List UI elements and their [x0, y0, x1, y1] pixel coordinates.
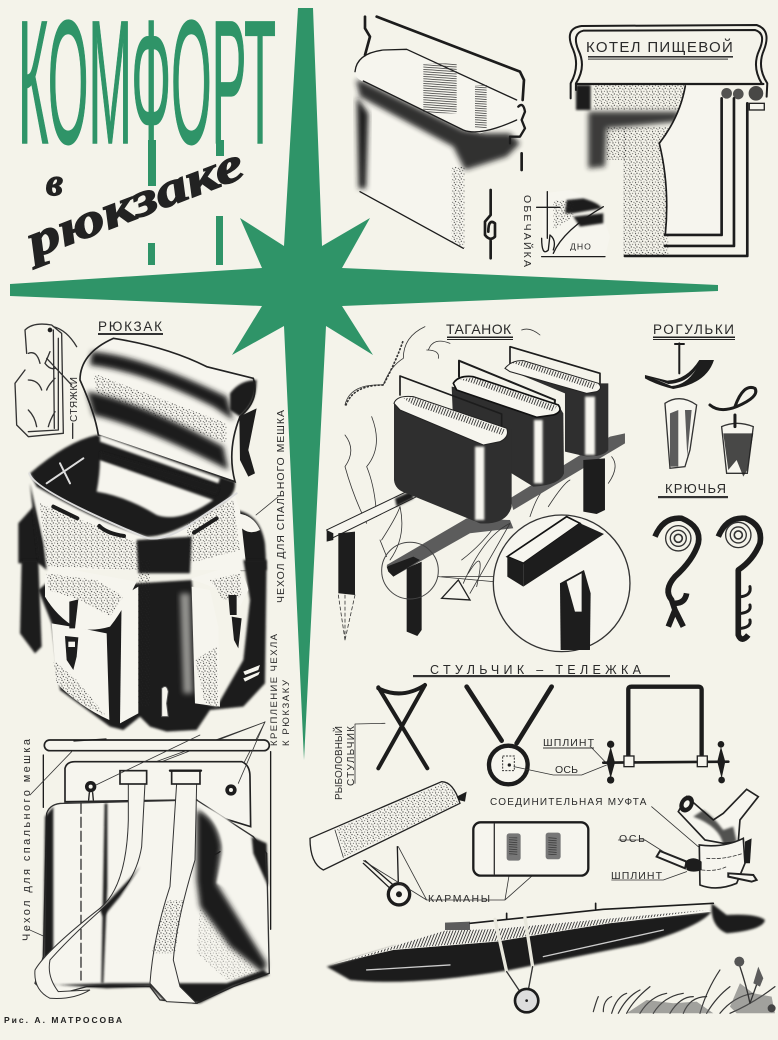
- rails: [327, 490, 417, 538]
- title: Комфорт: [18, 0, 276, 265]
- lower part: [20, 560, 267, 732]
- illustration: grass and flowers: [593, 957, 776, 1013]
- label: шплинт (sleeve): ШПЛИНТ: [611, 870, 663, 882]
- label: котел пищевой: КОТЕЛ ПИЩЕВОЙ: [586, 38, 734, 56]
- stitches and seam: [79, 803, 83, 980]
- center panel: [180, 593, 193, 693]
- smoke: [345, 327, 540, 405]
- green eight-pointed star: [10, 8, 718, 760]
- illustration: connecting sleeve: [612, 789, 758, 888]
- label: чехол для спального мешка (lower): Чехол для спального мешка: [21, 738, 33, 941]
- bottom detail: [542, 190, 610, 257]
- label: стяжки: СТЯЖКИ: [69, 377, 80, 422]
- label: чехол для спального мешка (upper): [256, 410, 287, 603]
- fasteners: [85, 781, 96, 792]
- buckles: [120, 771, 147, 784]
- illustration: kayak on cart: [327, 903, 765, 1012]
- label: крепление чехла к рюкзаку: КРЕПЛЕНИЕ ЧЕХЛА: [269, 633, 280, 746]
- right pocket: [192, 587, 220, 707]
- label: рогульки: РОГУЛЬКИ: [653, 322, 734, 337]
- folding stool: [378, 685, 427, 768]
- interior: [30, 435, 235, 537]
- illustration: hooks: [655, 518, 760, 639]
- label: ось (sleeve): ОСЬ: [619, 833, 645, 845]
- three tins: [394, 347, 608, 523]
- label: крепление чехла к рюкзаку: [92, 633, 292, 786]
- label: обечайка: ОБЕЧАЙКА: [521, 195, 534, 267]
- slots: [53, 507, 217, 536]
- label: стульчик — тележка: СТУЛЬЧИК – ТЕЛЕЖКА: [430, 663, 642, 677]
- big circle: [493, 515, 630, 652]
- illustration: assembled cart tube: [310, 782, 551, 905]
- left strap: [35, 783, 145, 999]
- wheel with legs: [467, 687, 552, 743]
- label: рыболовный стульчик: СТУЛЬЧИК: [346, 726, 357, 786]
- illustration: fishing stool and cart frame: [378, 685, 728, 784]
- illustration: cart pockets panel: [473, 822, 588, 876]
- stove legs: [338, 532, 355, 595]
- fire triangle: [442, 580, 470, 600]
- caption: artist credit: Рис. А. МАТРОСОВА: [4, 1015, 122, 1025]
- small circle: [382, 542, 438, 599]
- flap: [80, 338, 255, 482]
- label: таганок: ТАГАНОК: [446, 321, 512, 337]
- upper part: [18, 338, 267, 573]
- label: крючья: КРЮЧЬЯ: [665, 481, 727, 496]
- label: крепление чехла к рюкзаку: К РЮКЗАКУ: [281, 679, 292, 746]
- label: соединительная муфта: СОЕДИНИТЕЛЬНАЯ МУФТА: [490, 797, 647, 808]
- flames: [345, 417, 615, 587]
- illustration: food kettle section: [570, 25, 767, 257]
- label: ось (upper): ОСЬ: [555, 764, 578, 776]
- subtitle: в рюкзаке: рюкзаке: [14, 137, 251, 270]
- cart frame: [628, 687, 702, 756]
- label: карманы: КАРМАНЫ: [428, 893, 490, 905]
- illustration: mess tin: [355, 17, 610, 258]
- label: рыболовный стульчик: РЫБОЛОВНЫЙ: [332, 726, 345, 800]
- label: рюкзак: РЮКЗАК: [98, 319, 163, 334]
- illustration: backpack back view with cover: [28, 722, 271, 1003]
- illustration: trivet with three mess tins: [327, 327, 630, 652]
- illustration: forked stakes: [645, 343, 756, 477]
- label: рыболовный стульчик: [332, 723, 385, 800]
- right strap: [150, 783, 197, 1003]
- label: днo: ДНО: [570, 241, 592, 251]
- icon: folded backpack with straps: [15, 324, 77, 438]
- illustration: open backpack: [18, 338, 267, 732]
- subtitle: в рюкзаке: [14, 137, 251, 270]
- label: шплинт (upper): ШПЛИНТ: [543, 737, 595, 749]
- seam detail: [485, 190, 495, 258]
- subtitle: в рюкзаке: в: [46, 162, 63, 204]
- label: чехол для спального мешка (upper): ЧЕХОЛ ДЛЯ СПАЛЬНОГО МЕШКА: [275, 410, 287, 603]
